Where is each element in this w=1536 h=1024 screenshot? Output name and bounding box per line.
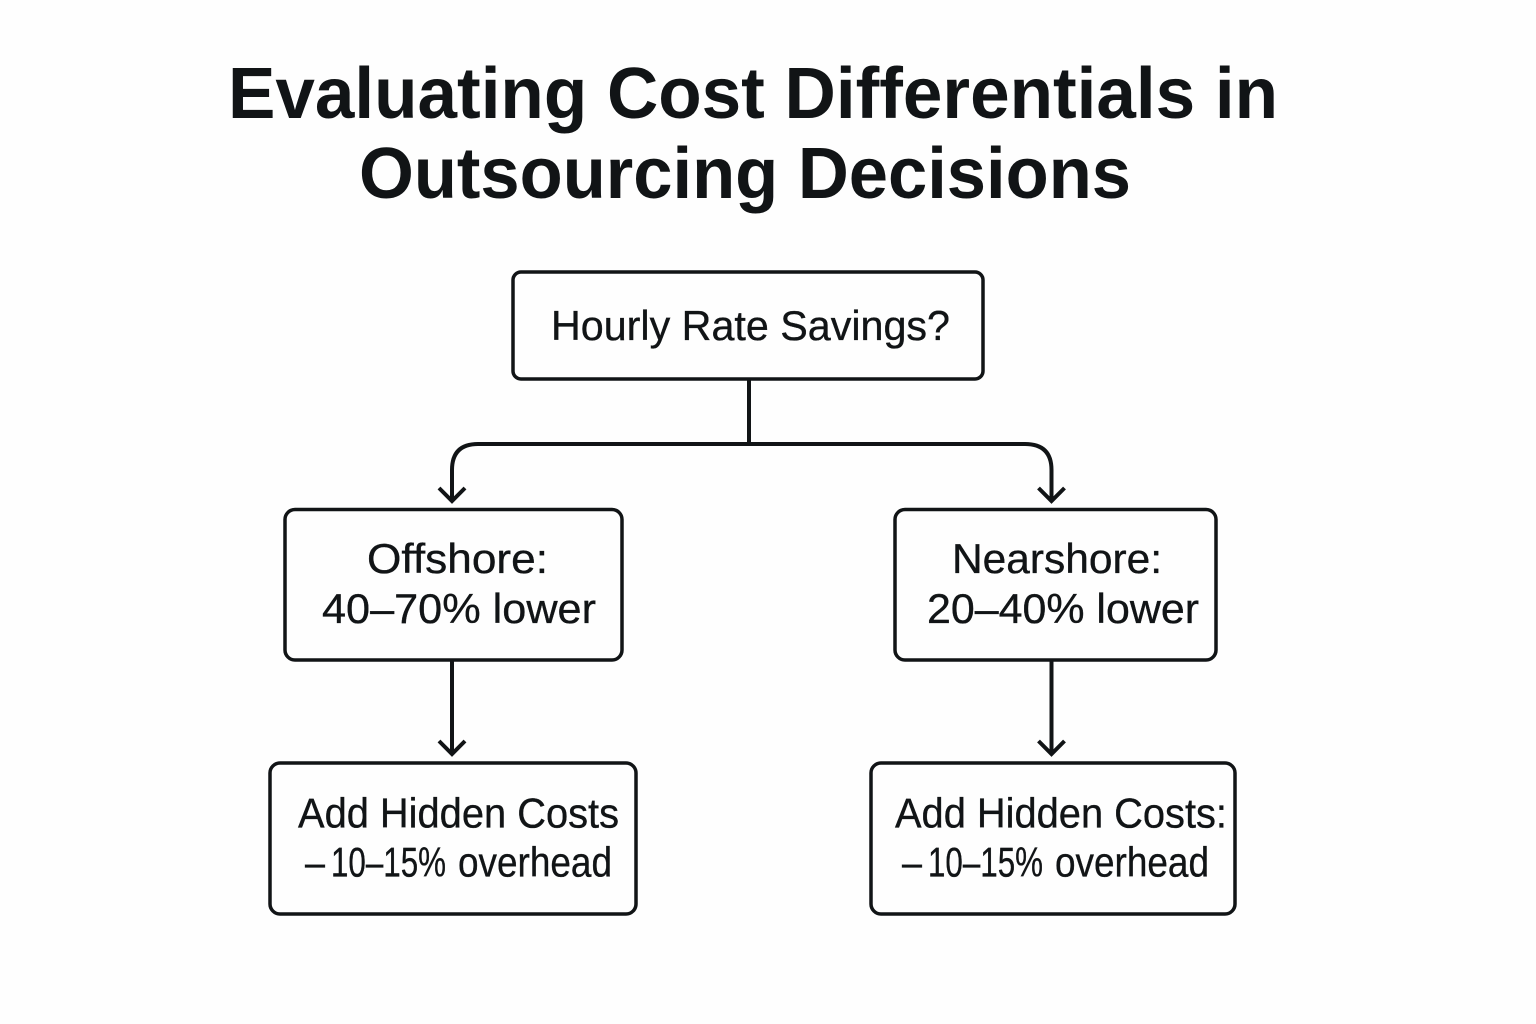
title: Outsourcing Decisions [359, 134, 1131, 214]
box: nearshore [895, 510, 1216, 660]
box: nearshore hidden costs: Add Hidden Costs: [895, 790, 1227, 836]
box: nearshore hidden costs: overhead [1055, 838, 1209, 886]
box: offshore hidden costs [270, 763, 636, 914]
box: nearshore: Nearshore: [952, 535, 1162, 582]
box: offshore hidden costs: 10–15% [331, 838, 446, 886]
title [228, 54, 1278, 214]
box: offshore hidden costs: overhead [458, 838, 612, 886]
box: nearshore hidden costs: – [902, 838, 923, 886]
box: offshore: Offshore: [367, 535, 548, 582]
box: hourly rate savings [513, 272, 983, 379]
title: Evaluating Cost Differentials in [228, 54, 1278, 134]
box: nearshore: 20–40% lower [927, 585, 1199, 632]
connector: branch to both options [439, 379, 1064, 501]
arrow: nearshore to hidden costs [1038, 660, 1064, 754]
box: nearshore hidden costs [871, 763, 1235, 914]
box: offshore: 40–70% lower [322, 585, 596, 632]
arrow: offshore to hidden costs [439, 660, 465, 754]
box: offshore hidden costs: Add Hidden Costs [298, 790, 619, 836]
box: hourly rate savings: Hourly Rate Savings? [551, 302, 950, 349]
box: offshore hidden costs: – [305, 838, 326, 886]
box: offshore [285, 510, 622, 660]
box: nearshore hidden costs: 10–15% [928, 838, 1043, 886]
